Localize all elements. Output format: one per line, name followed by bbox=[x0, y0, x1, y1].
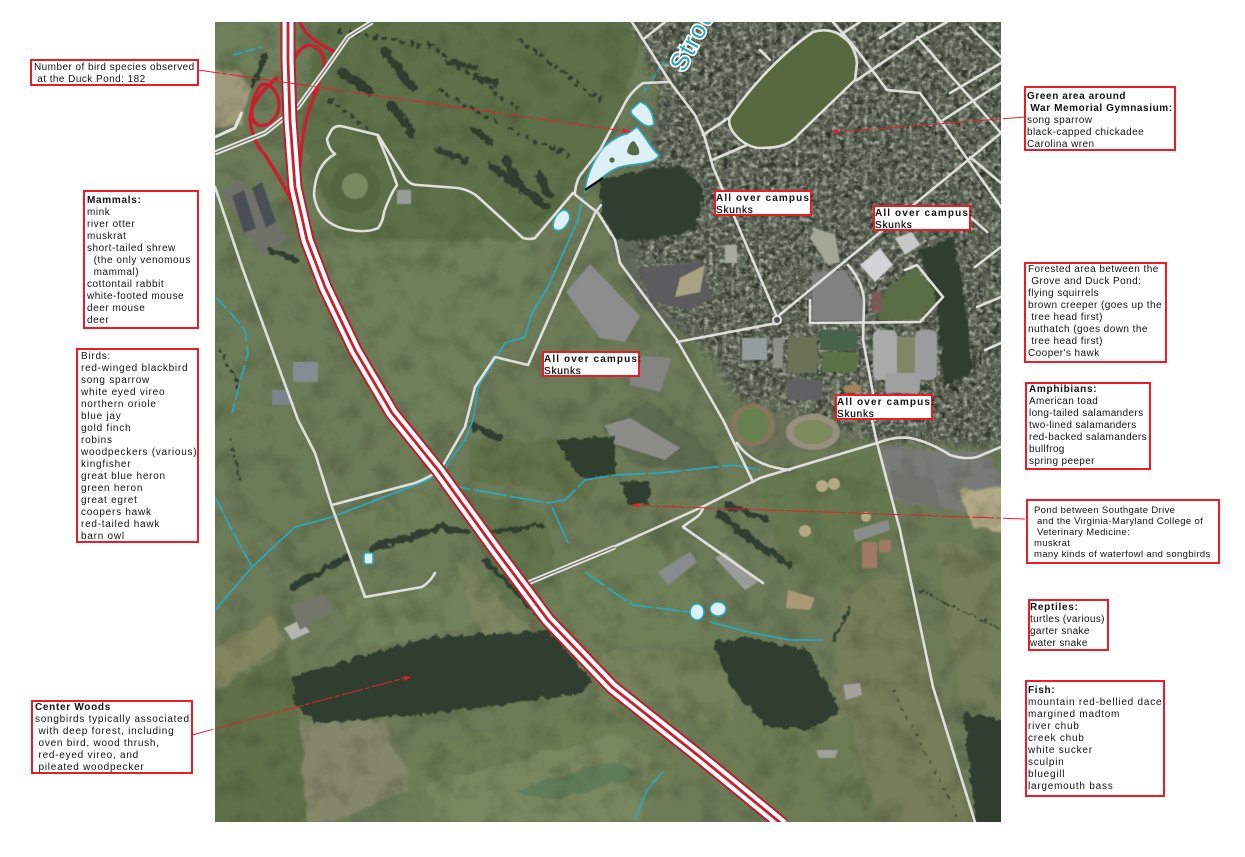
callout: skunks 1: All over campus: Skunks bbox=[716, 193, 815, 216]
leader: Southgate pond bbox=[631, 503, 1025, 519]
double carriageway roads bbox=[215, 22, 615, 583]
callout leader lines bbox=[192, 70, 1025, 735]
campus urban texture bbox=[600, 22, 1001, 452]
callout: bird species count: Number of bird species observed at the Duck Pond: 182 bbox=[34, 62, 195, 85]
panel: reptiles: Reptiles: turtles (various) garter snake water snake bbox=[1030, 602, 1105, 649]
leader: War Memorial Gymnasium bbox=[831, 117, 1025, 134]
white road network bbox=[215, 22, 1001, 822]
built-up detail: lots, buildings, sports fields bbox=[222, 30, 941, 758]
field mottling bbox=[215, 22, 1001, 822]
callout: skunks 2: All over campus: Skunks bbox=[875, 208, 974, 231]
panel: mammals: Mammals: mink river otter muskrat short-tailed shrew (the only venomous mammal) cottontail rabbit white-footed mouse deer mouse deer bbox=[87, 195, 191, 326]
roundabout bbox=[773, 316, 781, 324]
leader: Duck Pond bbox=[198, 70, 632, 133]
panel: Southgate pond: Pond between Southgate Drive and the Virginia-Maryland College of Veterinary Medicine: muskrat many kinds of waterfowl and songbirds bbox=[1034, 505, 1211, 560]
interstate highway bbox=[288, 22, 783, 825]
panel: birds: Birds: red-winged blackbird song sparrow white eyed vireo northern oriole blue jay gold finch robins woodpeckers (various) kingfisher great blue heron green heron great egret coopers hawk red-tailed hawk barn owl bbox=[81, 351, 197, 542]
leader: Center Woods bbox=[192, 676, 411, 735]
ponds bbox=[364, 102, 726, 620]
callout: skunks 4: All over campus: Skunks bbox=[837, 397, 936, 420]
highway interchange ramps bbox=[250, 22, 335, 213]
panel: Center Woods: Center Woods songbirds typically associated with deep forest, including oven bird, wood thrush, red-eyed vireo, and pileated woodpecker bbox=[35, 702, 190, 773]
panel: amphibians: Amphibians: American toad long-tailed salamanders two-lined salamanders red-backed salamanders bullfrog spring peeper bbox=[1029, 384, 1147, 467]
streams bbox=[215, 47, 823, 820]
panel: fish: Fish: mountain red-bellied dace margined madtom river chub creek chub white sucker sculpin bluegill largemouth bass bbox=[1028, 685, 1162, 792]
pond islands and dam bbox=[585, 141, 639, 190]
aerial map with roads, streams, ponds and callout leader lines bbox=[193, 22, 1025, 822]
aerial imagery bbox=[205, 0, 1010, 830]
panel: War Memorial Gymnasium green area: Green area around War Memorial Gymnasium: song sparrow black-capped chickadee Carolina wren bbox=[1027, 91, 1173, 150]
callout: skunks 3: All over campus: Skunks bbox=[544, 354, 643, 377]
field patches bbox=[205, 15, 1010, 830]
woods and tree rows bbox=[220, 30, 1005, 830]
panel: forested area: Forested area between the Grove and Duck Pond: flying squirrels brown creeper (goes up the tree head first) nuthatch (goes down the tree head first) Cooper's hawk bbox=[1028, 264, 1162, 359]
